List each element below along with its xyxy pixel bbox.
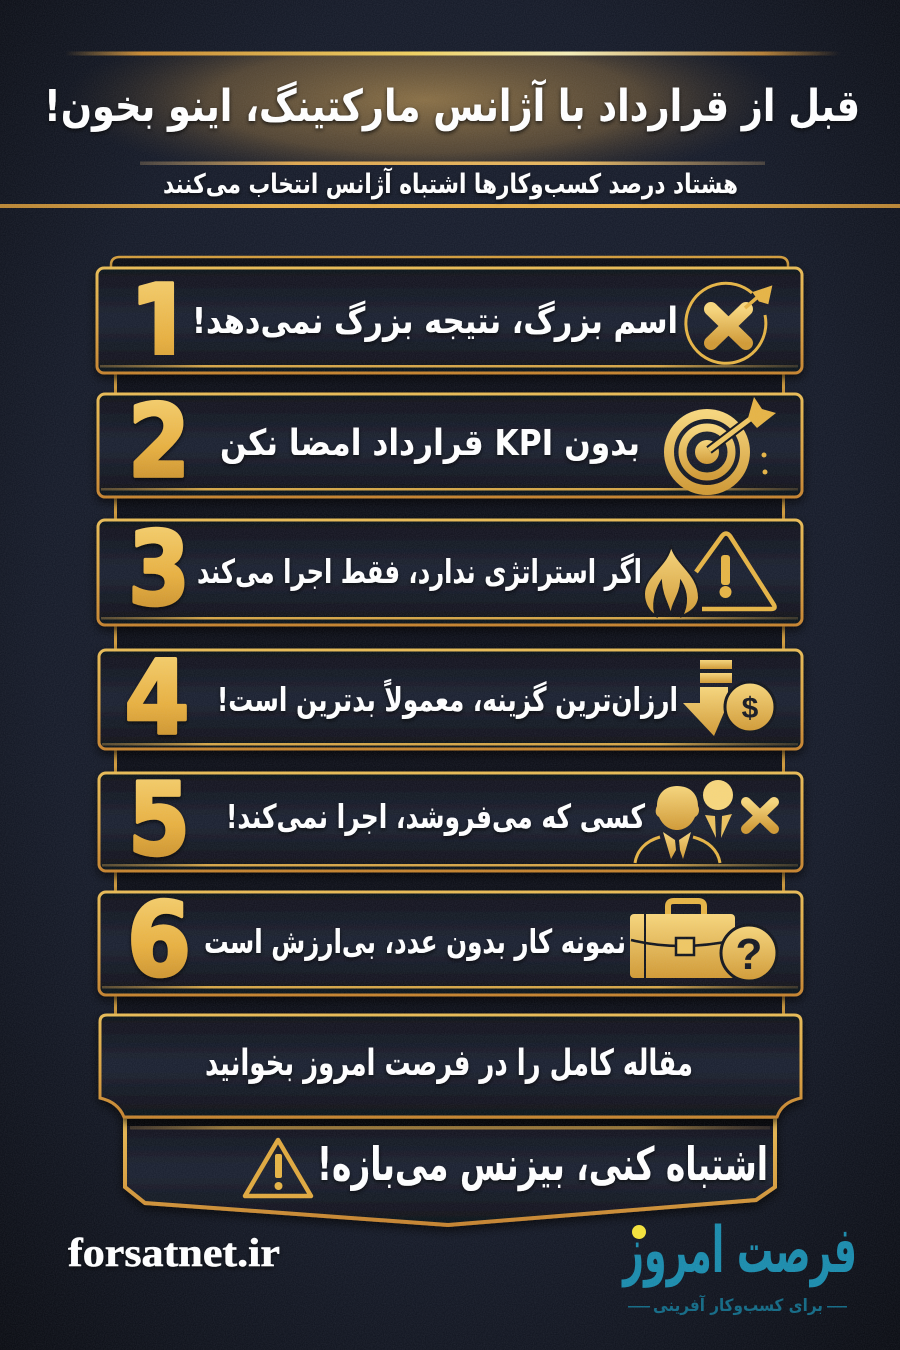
icon: falling price arrow and coin <box>683 660 775 736</box>
panel 5 <box>99 761 802 878</box>
article text: مقاله کامل را در فرصت امروز بخوانید <box>205 1043 693 1084</box>
icon: briefcase with question mark: ? <box>736 930 762 979</box>
back tab and side rails <box>111 257 788 1023</box>
icon: warning triangle and flame <box>644 534 775 616</box>
panel 3 <box>98 510 802 629</box>
panel 6 <box>99 881 802 1000</box>
panel: read the article <box>100 1015 801 1117</box>
number 2: 2 <box>128 383 190 500</box>
icon: target with arrow <box>669 397 776 490</box>
icon: crossed circle with arrow <box>686 283 770 363</box>
header rule middle <box>140 162 765 165</box>
panel 4 <box>99 639 802 758</box>
panel 2 <box>98 383 802 500</box>
text 3: اگر استراتژی ندارد، فقط اجرا می‌کند <box>197 552 642 592</box>
number 1: 1 <box>129 259 195 404</box>
header rule bottom <box>0 204 900 208</box>
logo tagline: برای کسب‌وکار آفرینی <box>653 1294 823 1316</box>
number 6: 6 <box>127 881 191 1000</box>
number 5: 5 <box>128 761 190 878</box>
text 2: بدون KPI قرارداد امضا نکن <box>220 423 640 464</box>
website address: forsatnet.ir <box>68 1230 280 1275</box>
text 6: نمونه کار بدون عدد، بی‌ارزش است <box>204 922 626 962</box>
panel 1 <box>92 263 806 386</box>
header glow <box>98 56 752 162</box>
panel: lower ribbon <box>125 1117 775 1225</box>
icon: warning triangle <box>245 1140 311 1196</box>
subtitle: هشتاد درصد کسب‌وکارها اشتباه آژانس انتخاب می‌کنند <box>163 167 738 200</box>
header rule top <box>65 52 840 56</box>
number 3: 3 <box>128 510 190 629</box>
text 5: کسی که می‌فروشد، اجرا نمی‌کند! <box>226 797 646 837</box>
text 1: اسم بزرگ، نتیجه بزرگ نمی‌دهد! <box>192 299 678 342</box>
icon: falling price arrow and coin: $ <box>742 692 759 725</box>
text 4: ارزان‌ترین گزینه، معمولاً بدترین است! <box>217 678 678 720</box>
icon: briefcase with question mark <box>630 901 777 981</box>
logo <box>621 1214 857 1316</box>
number 4: 4 <box>124 639 190 758</box>
icon: seller and executor people <box>635 780 774 863</box>
